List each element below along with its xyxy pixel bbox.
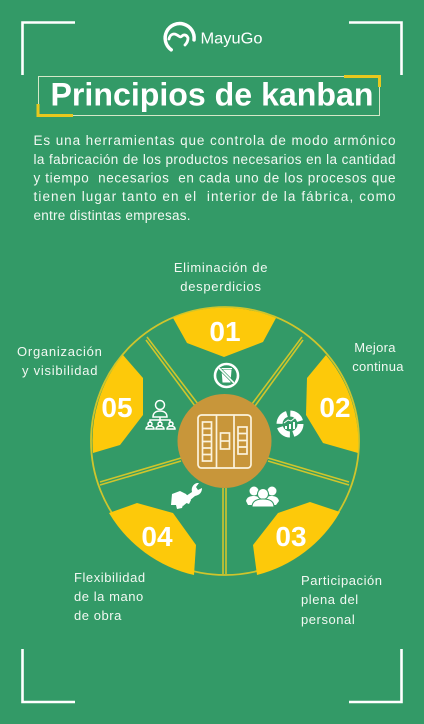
label: Participación plena del personal: plena del	[301, 592, 359, 607]
segment 01	[173, 308, 276, 357]
center hub	[178, 394, 272, 488]
segment 02	[306, 355, 358, 453]
segment 04	[109, 503, 196, 575]
segment 04: 04	[141, 521, 173, 552]
label: Eliminación de desperdicios: Eliminación de	[174, 260, 268, 275]
segment 01: 01	[209, 316, 241, 347]
outer ring	[91, 307, 359, 575]
label: Participación plena del personal: Participación	[301, 573, 383, 588]
label: Eliminación de desperdicios	[174, 260, 268, 294]
intro paragraph: tienen lugar tanto en el interior de la fábrica, como	[34, 189, 396, 204]
icon: team of people	[246, 486, 279, 507]
intro paragraph	[34, 133, 396, 223]
wheel diagram	[91, 307, 359, 575]
label: Mejora continua	[352, 340, 404, 374]
label: Mejora continua: continua	[352, 359, 404, 374]
label: Organización y visibilidad: Organización	[17, 344, 103, 359]
segment 03	[253, 502, 340, 575]
icon: tools	[171, 483, 202, 509]
intro paragraph: Es una herramientas que controla de modo armónico	[34, 133, 396, 148]
bottom corner brackets	[22, 649, 402, 702]
logo: MayuGo	[160, 18, 262, 57]
segment 03: 03	[275, 521, 307, 552]
title: Principios de kanban	[50, 76, 374, 112]
icon: improvement cycle	[280, 414, 300, 434]
icon: hierarchy	[146, 400, 175, 429]
label: Organización y visibilidad	[17, 344, 103, 378]
segment 05	[92, 355, 143, 453]
icon: kanban board	[198, 415, 251, 468]
label: Flexibilidad de la mano de obra: Flexibilidad	[74, 570, 146, 585]
intro paragraph: y tiempo necesarios en cada uno de los procesos que	[34, 170, 396, 186]
logo: MayuGo: MayuGo	[200, 30, 262, 48]
spoke dividers	[100, 337, 349, 574]
label: Participación plena del personal	[301, 573, 383, 627]
icon: no trash	[215, 364, 238, 387]
label: Mejora continua: Mejora	[354, 340, 396, 355]
segment 05: 05	[101, 392, 133, 423]
intro paragraph: la fabricación de los productos necesarios en la cantidad	[34, 152, 396, 167]
top corner brackets	[22, 22, 402, 75]
segment 02: 02	[319, 392, 351, 423]
label: Organización y visibilidad: y visibilidad	[22, 363, 98, 378]
intro paragraph: entre distintas empresas.	[34, 208, 190, 223]
title box	[38, 76, 380, 116]
label: Participación plena del personal: personal	[301, 612, 355, 627]
label: Flexibilidad de la mano de obra: de obra	[74, 608, 122, 623]
label: Flexibilidad de la mano de obra	[74, 570, 146, 623]
label: Eliminación de desperdicios: desperdicios	[180, 279, 262, 294]
label: Flexibilidad de la mano de obra: de la mano	[74, 589, 144, 604]
